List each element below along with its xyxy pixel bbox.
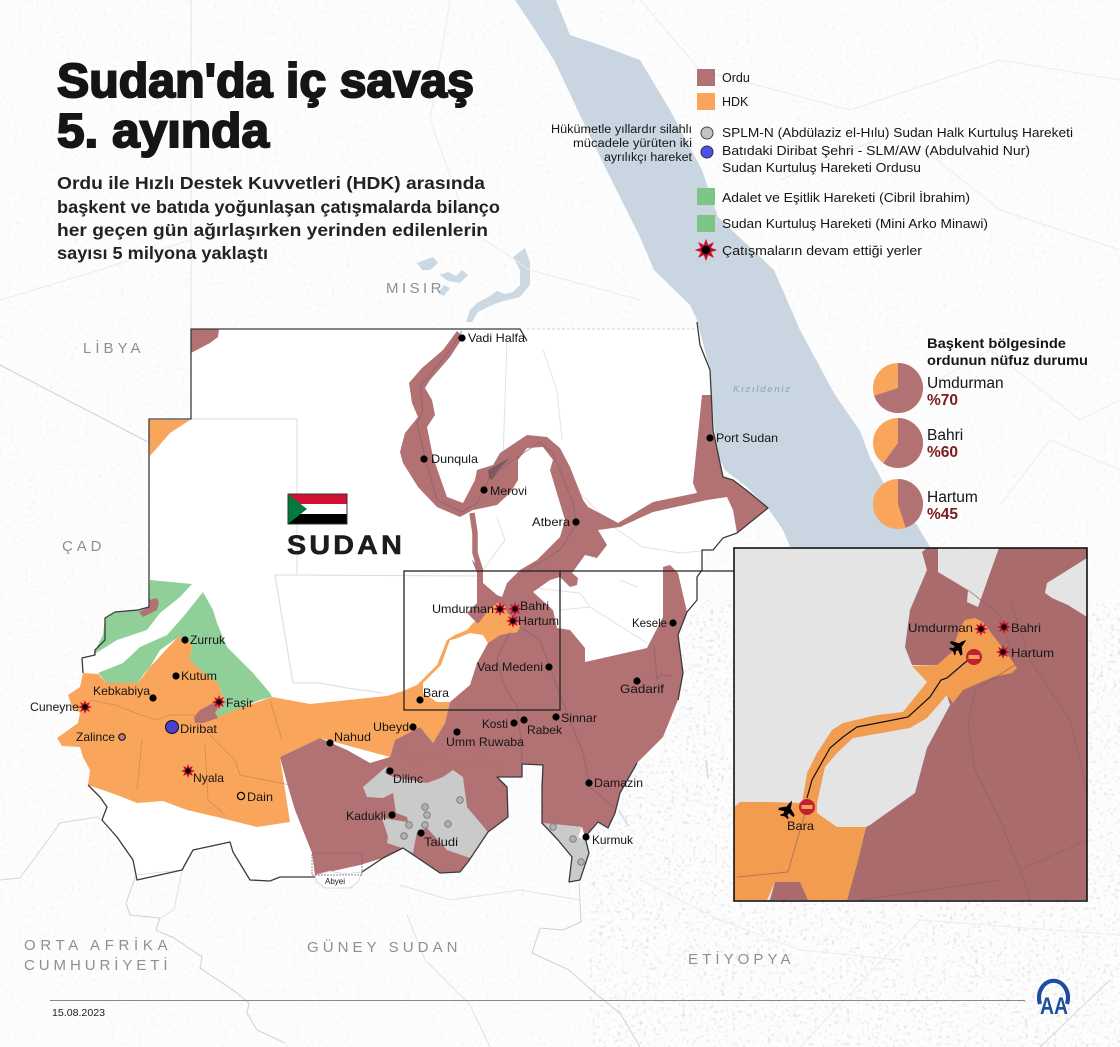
pie: Bahri: Bahri <box>927 427 963 444</box>
Sudan country area <box>57 329 768 882</box>
city markers and names: Nyala <box>193 771 224 785</box>
city markers and names: Hartum <box>518 614 559 628</box>
country labels: MISIR <box>386 280 444 297</box>
subtitle text: sayısı 5 milyona yaklaştı <box>57 243 268 263</box>
legend: HDK <box>722 95 749 109</box>
inset map: Khartoum to Bara <box>734 548 1087 901</box>
map: orange Khartoum band over army <box>475 603 520 643</box>
Sudan border <box>82 322 768 882</box>
city markers and names: Merovi <box>490 484 527 498</box>
map: RSF (HDK) territory <box>57 420 520 827</box>
city markers and names: Umdurman <box>432 602 494 616</box>
country labels <box>24 280 793 974</box>
pie: Bahri: %60 <box>927 444 958 461</box>
city markers and names: Vad Medeni <box>477 660 543 674</box>
pie: Hartum: Hartum <box>927 489 978 506</box>
inset city labels: Umdurman <box>908 621 973 635</box>
city markers and names: Cuneyne <box>30 700 79 714</box>
pie: Bahri <box>873 418 963 468</box>
inset conflict markers <box>974 620 1011 659</box>
pie charts: army influence: ordunun nüfuz durumu <box>927 352 1088 368</box>
legend <box>551 69 1073 261</box>
city markers and names: Dunqula <box>431 452 478 466</box>
rivers on map <box>417 331 672 807</box>
city markers and names: Ubeyd <box>373 720 409 734</box>
jets <box>776 633 972 821</box>
country labels: ORTA AFRİKA <box>24 936 170 954</box>
country labels: LİBYA <box>83 339 143 357</box>
Red Sea <box>515 0 930 547</box>
title <box>57 55 474 158</box>
pie: Umdurman <box>873 363 1004 413</box>
subtitle text: her geçen gün ağırlaşırken yerinden edilenlerin <box>57 220 488 240</box>
city markers and names: Bara <box>423 686 449 700</box>
country labels: CUMHURİYETİ <box>24 956 170 974</box>
date: 15.08.2023 <box>52 1007 105 1019</box>
inset city labels: Bara <box>787 819 814 833</box>
map: army territory <box>139 329 768 875</box>
city markers and names: Kosti <box>482 717 508 731</box>
title: 5. ayında <box>57 105 269 158</box>
city markers and names: Dain <box>247 790 273 804</box>
city markers and names: Dilinc <box>393 772 423 786</box>
city markers and names <box>30 331 778 849</box>
legend: Adalet ve Eşitlik Hareketi (Cibril İbrahim) <box>722 191 970 205</box>
Lake Nasser and Nile in Egypt <box>417 248 530 322</box>
subtitle text <box>57 173 500 263</box>
inset city labels: Hartum <box>1011 646 1054 660</box>
footer rule <box>50 1000 1025 1001</box>
title: Sudan'da iç savaş <box>57 55 474 108</box>
roads in Darfur <box>90 700 500 815</box>
city markers and names: Faşir <box>226 696 253 710</box>
legend: Ordu <box>722 71 750 85</box>
no-entry signs <box>799 649 982 815</box>
legend: Çatışmaların devam ettiği yerler <box>722 244 922 258</box>
city markers and names: Gadarif <box>620 682 665 696</box>
legend: Hükümetle yıllardır silahlı <box>551 124 692 136</box>
Abyei <box>312 853 362 888</box>
city markers and names: Sinnar <box>561 711 597 725</box>
map: SPLM-N territory <box>363 766 589 882</box>
Khartoum region frame <box>404 571 734 710</box>
pie: Umdurman: %70 <box>927 392 958 409</box>
city markers and names: Bahri <box>520 599 549 613</box>
AA logo <box>1039 981 1068 1020</box>
city markers and names: Umm Ruwaba <box>446 735 524 749</box>
legend: SPLM-N (Abdülaziz el-Hılu) Sudan Halk Kurtuluş Hareketi <box>722 126 1073 140</box>
Abyei: Abyei <box>325 877 345 886</box>
Ethiopian highland texture <box>590 600 1120 1047</box>
city markers and names: Port Sudan <box>716 431 778 445</box>
country labels: ETİYOPYA <box>688 950 793 968</box>
country labels: GÜNEY SUDAN <box>307 938 460 956</box>
lakes in Ethiopia <box>619 760 708 826</box>
map: Justice and Equality / SLM territory <box>93 580 272 717</box>
city markers and names: Rabek <box>527 723 563 737</box>
city markers and names: Vadi Halfa <box>468 331 525 345</box>
pie: Umdurman: Umdurman <box>927 375 1004 392</box>
city markers and names: Damazin <box>594 776 643 790</box>
city markers and names: Kadukli <box>346 809 386 823</box>
Red Sea central basin <box>712 335 883 540</box>
legend: mücadele yürüten iki <box>573 138 692 150</box>
pie charts: army influence <box>873 335 1088 529</box>
city markers and names: Diribat <box>180 722 218 736</box>
legend: ayrılıkçı hareket <box>604 152 693 164</box>
city markers and names: Kutum <box>181 669 217 683</box>
inset city labels <box>787 621 1054 833</box>
pie: Hartum: %45 <box>927 506 958 523</box>
city markers and names: Zurruk <box>190 633 226 647</box>
SPLM-N location markers <box>401 797 584 865</box>
country label: Sudan: SUDAN <box>287 530 405 560</box>
legend: Sudan Kurtuluş Hareketi (Mini Arko Minawi) <box>722 217 988 231</box>
city markers and names: Kurmuk <box>592 833 634 847</box>
legend: Sudan Kurtuluş Hareketi Ordusu <box>722 161 921 175</box>
inset city labels: Bahri <box>1011 621 1041 635</box>
city markers and names: Kebkabiya <box>93 684 150 698</box>
Merowe reservoir <box>488 458 510 480</box>
city markers and names: Zalince <box>76 730 115 744</box>
supply route line <box>807 660 968 798</box>
subtitle text: başkent ve batıda yoğunlaşan çatışmalarda bilanço <box>57 197 500 217</box>
pie charts: army influence: Başkent bölgesinde <box>927 335 1066 351</box>
city markers and names: Nahud <box>334 730 371 744</box>
country labels: Kızıldeniz <box>733 384 790 395</box>
legend: Batıdaki Diribat Şehri - SLM/AW (Abdulvahid Nur) <box>722 144 1030 158</box>
city markers and names: Atbera <box>532 515 570 529</box>
country labels: ÇAD <box>62 538 104 555</box>
city markers and names: Kesele <box>632 616 667 630</box>
map: strand linking Merovi and Umdurman <box>472 513 481 572</box>
pie: Hartum <box>873 479 978 529</box>
city markers and names: Taludi <box>424 835 458 849</box>
AA logo: AA <box>1040 993 1068 1020</box>
subtitle text: Ordu ile Hızlı Destek Kuvvetleri (HDK) arasında <box>57 173 485 193</box>
flag of Sudan <box>288 494 347 524</box>
